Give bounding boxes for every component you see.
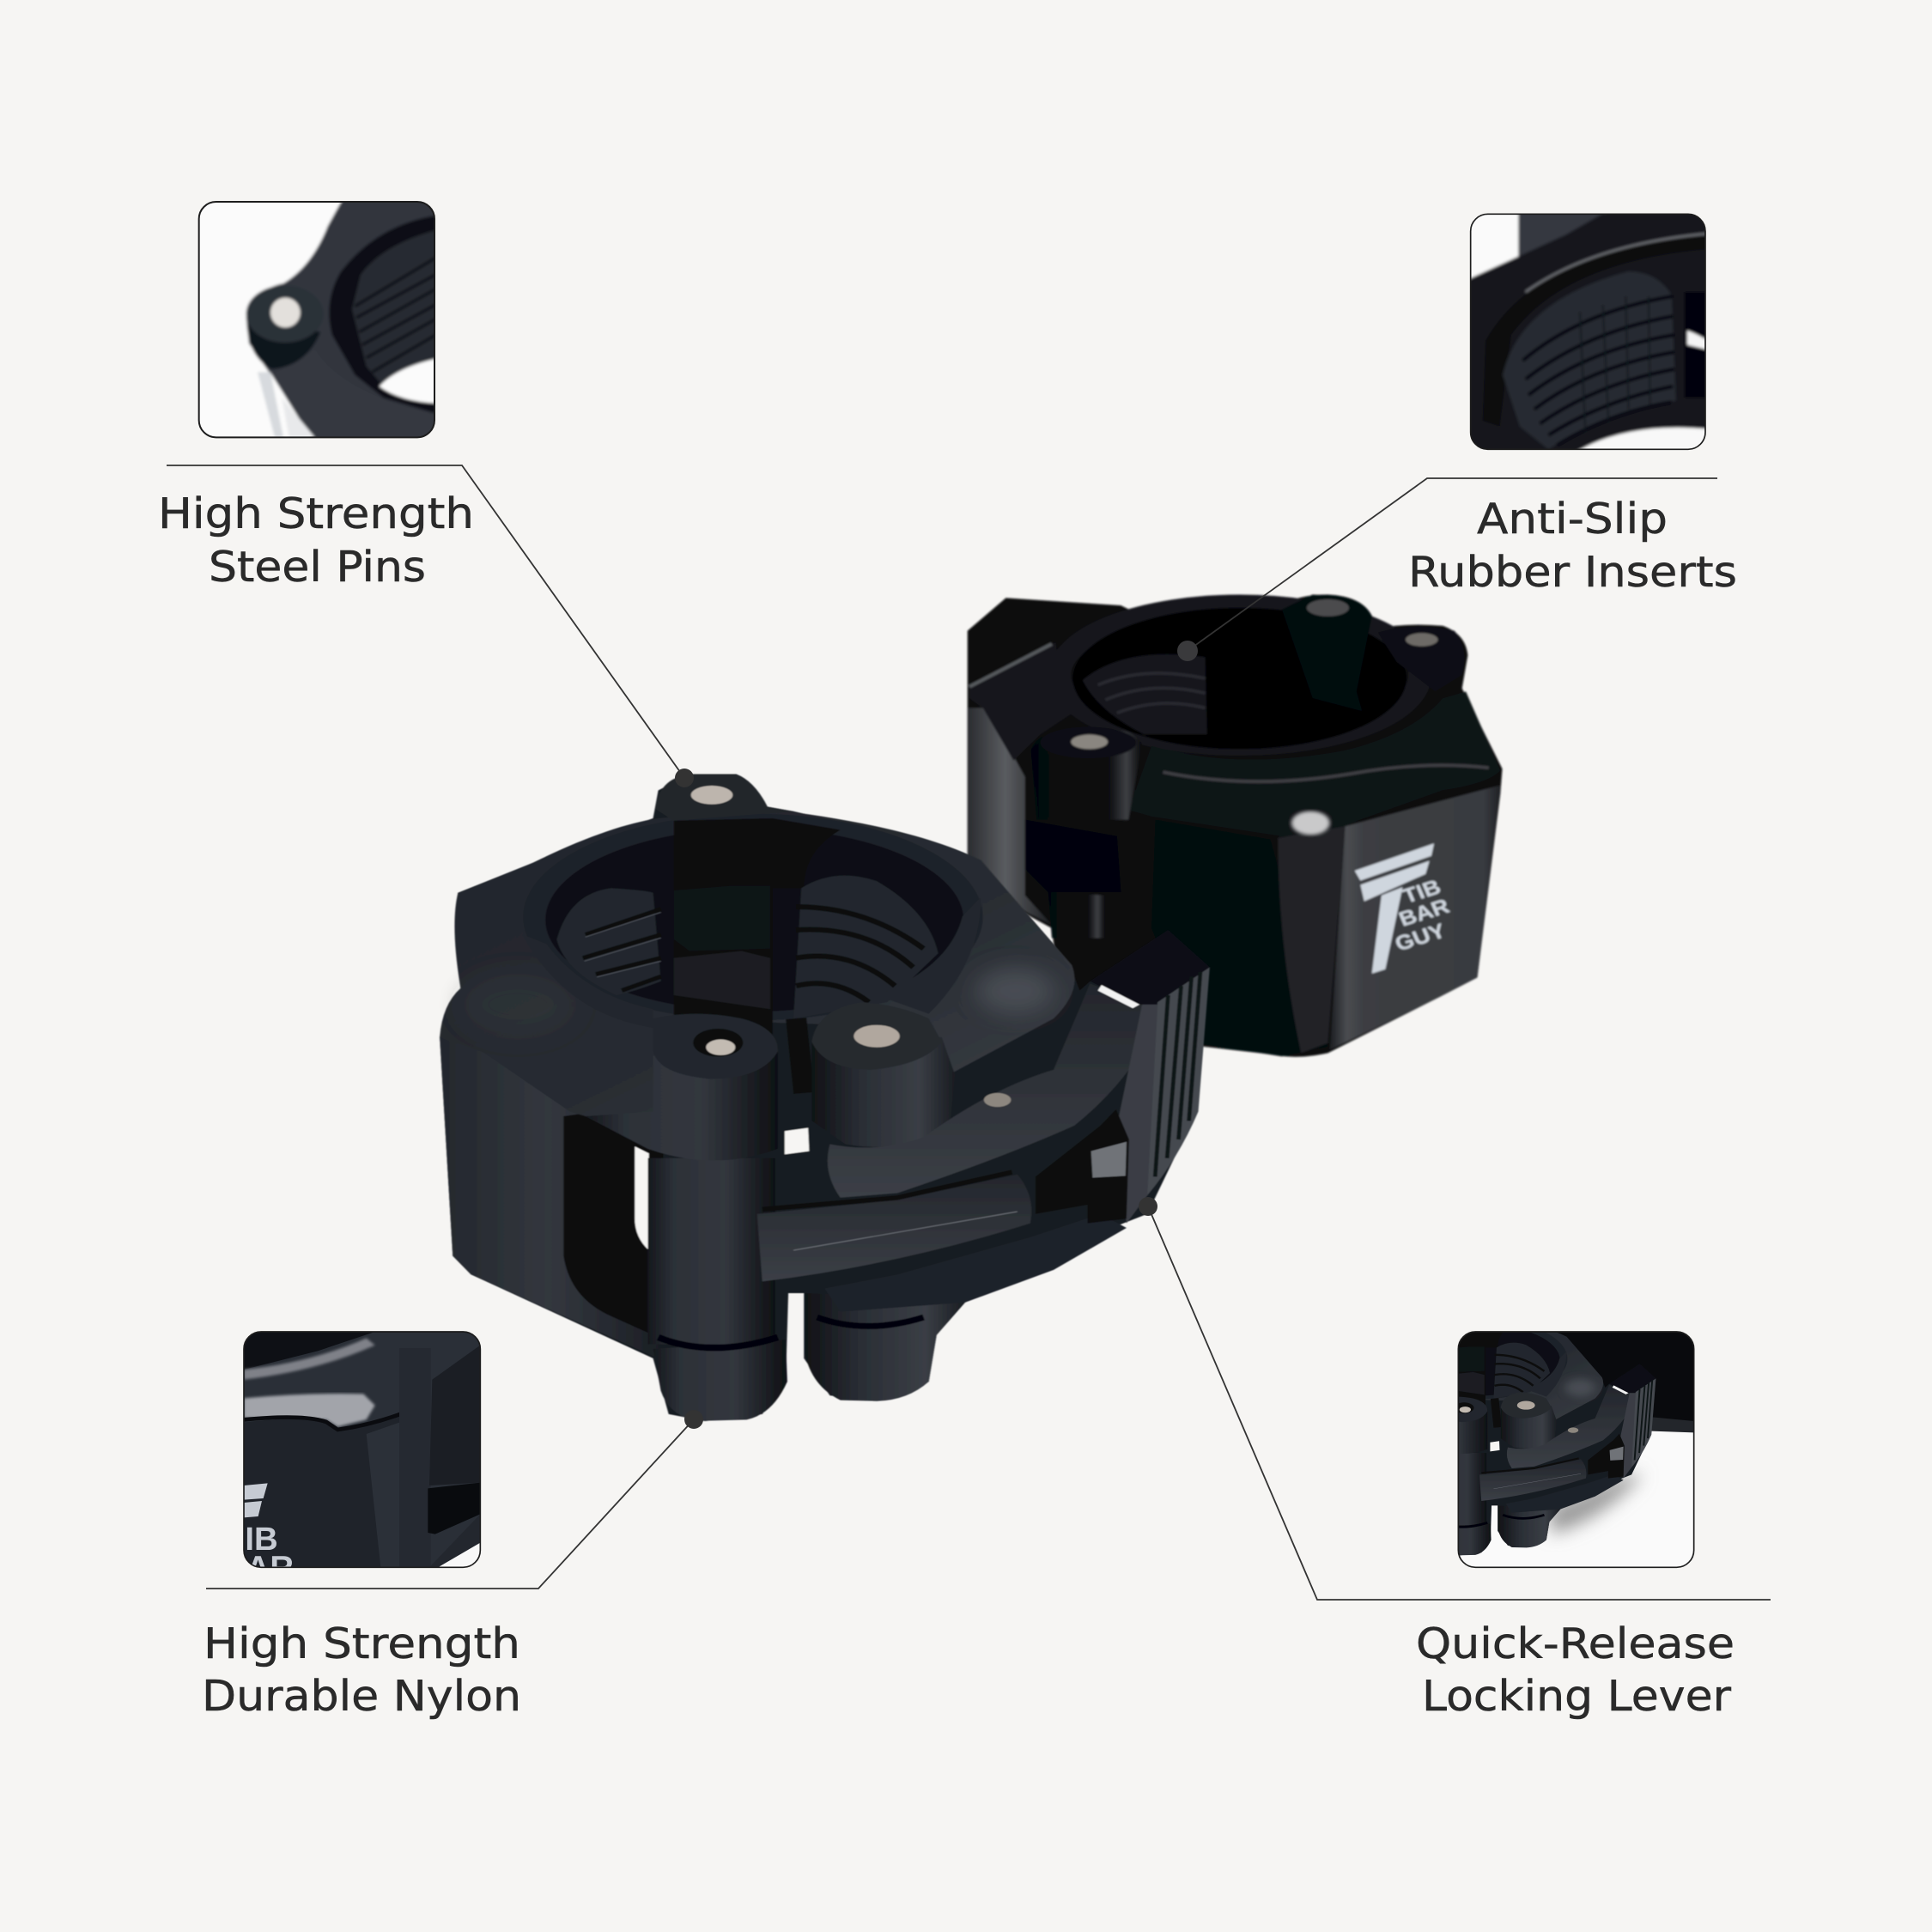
logo mark: T bar: BAR xyxy=(1395,895,1453,931)
locking lever arm xyxy=(828,983,1155,1198)
upper cylinder, right xyxy=(811,1002,955,1147)
label: high strength steel pins: High Strength xyxy=(158,489,474,538)
logo mark: T bar: GUY xyxy=(1392,920,1449,956)
lever ridged head xyxy=(1090,930,1210,1224)
label: anti-slip rubber inserts: Anti-Slip xyxy=(1477,495,1668,544)
label: quick-release locking lever: Locking Lever xyxy=(1422,1672,1732,1721)
ring rim xyxy=(523,814,983,1020)
speckled highlight: right shoulder xyxy=(975,967,1054,1014)
locking nut xyxy=(1036,1109,1129,1224)
leader line: rubber inserts xyxy=(1177,478,1717,661)
thumbnail: nylon texture close-up: IB xyxy=(245,1521,278,1558)
connecting link bar xyxy=(757,1172,1031,1281)
logo mark: T bar xyxy=(1355,843,1453,974)
small gap behind hinge xyxy=(785,1127,809,1154)
ring lip right xyxy=(877,897,981,1014)
label: anti-slip rubber inserts xyxy=(1408,495,1737,597)
label: quick-release locking lever: Quick-Release xyxy=(1416,1619,1735,1668)
thumbnail: lever close-up xyxy=(1458,1331,1695,1568)
thumbnail: nylon texture close-up: AR xyxy=(246,1549,294,1586)
right rubber insert xyxy=(793,876,939,1093)
product: front clamp with locking lever xyxy=(440,774,1210,1421)
label: high strength steel pins: Steel Pins xyxy=(209,543,426,592)
steel pin knob: back xyxy=(656,774,793,821)
label: anti-slip rubber inserts: Rubber Inserts xyxy=(1408,548,1737,597)
top surface xyxy=(440,809,1075,1122)
window recess xyxy=(563,1114,664,1340)
thumbnail: nylon texture close-up xyxy=(244,1332,480,1586)
clamp silhouette xyxy=(440,774,1210,1421)
ring lip left xyxy=(523,935,653,1028)
lower link xyxy=(824,1214,1127,1312)
label: high strength steel pins xyxy=(158,489,474,592)
thumbnail: steel pin close-up xyxy=(195,197,440,444)
logo mark: T bar: TIB xyxy=(1400,876,1444,908)
lower hinge cylinder, left xyxy=(647,1158,775,1345)
label: high strength durable nylon xyxy=(202,1619,521,1721)
product: rear clamp with logo xyxy=(968,595,1503,1057)
thumbnail: rubber insert close-up xyxy=(1466,209,1711,455)
leader line: durable nylon xyxy=(206,1410,703,1589)
label: quick-release locking lever xyxy=(1416,1619,1735,1721)
upper cylinder, left xyxy=(586,1014,778,1160)
label: high strength durable nylon: Durable Nylon xyxy=(202,1672,521,1721)
see-through gap xyxy=(635,1146,649,1250)
outer wall xyxy=(440,1037,659,1358)
leader line: steel pins xyxy=(167,465,694,787)
lower end cap, left xyxy=(653,1337,787,1421)
lever pin xyxy=(984,1093,1011,1107)
soft highlight: left shoulder xyxy=(460,972,575,1037)
leader line: locking lever xyxy=(1139,1197,1771,1600)
label: high strength durable nylon: High Strength xyxy=(204,1619,520,1668)
central column xyxy=(674,818,841,1065)
lower end cap, right xyxy=(805,1293,965,1401)
left rubber insert xyxy=(556,888,661,995)
ring opening xyxy=(545,828,963,1012)
